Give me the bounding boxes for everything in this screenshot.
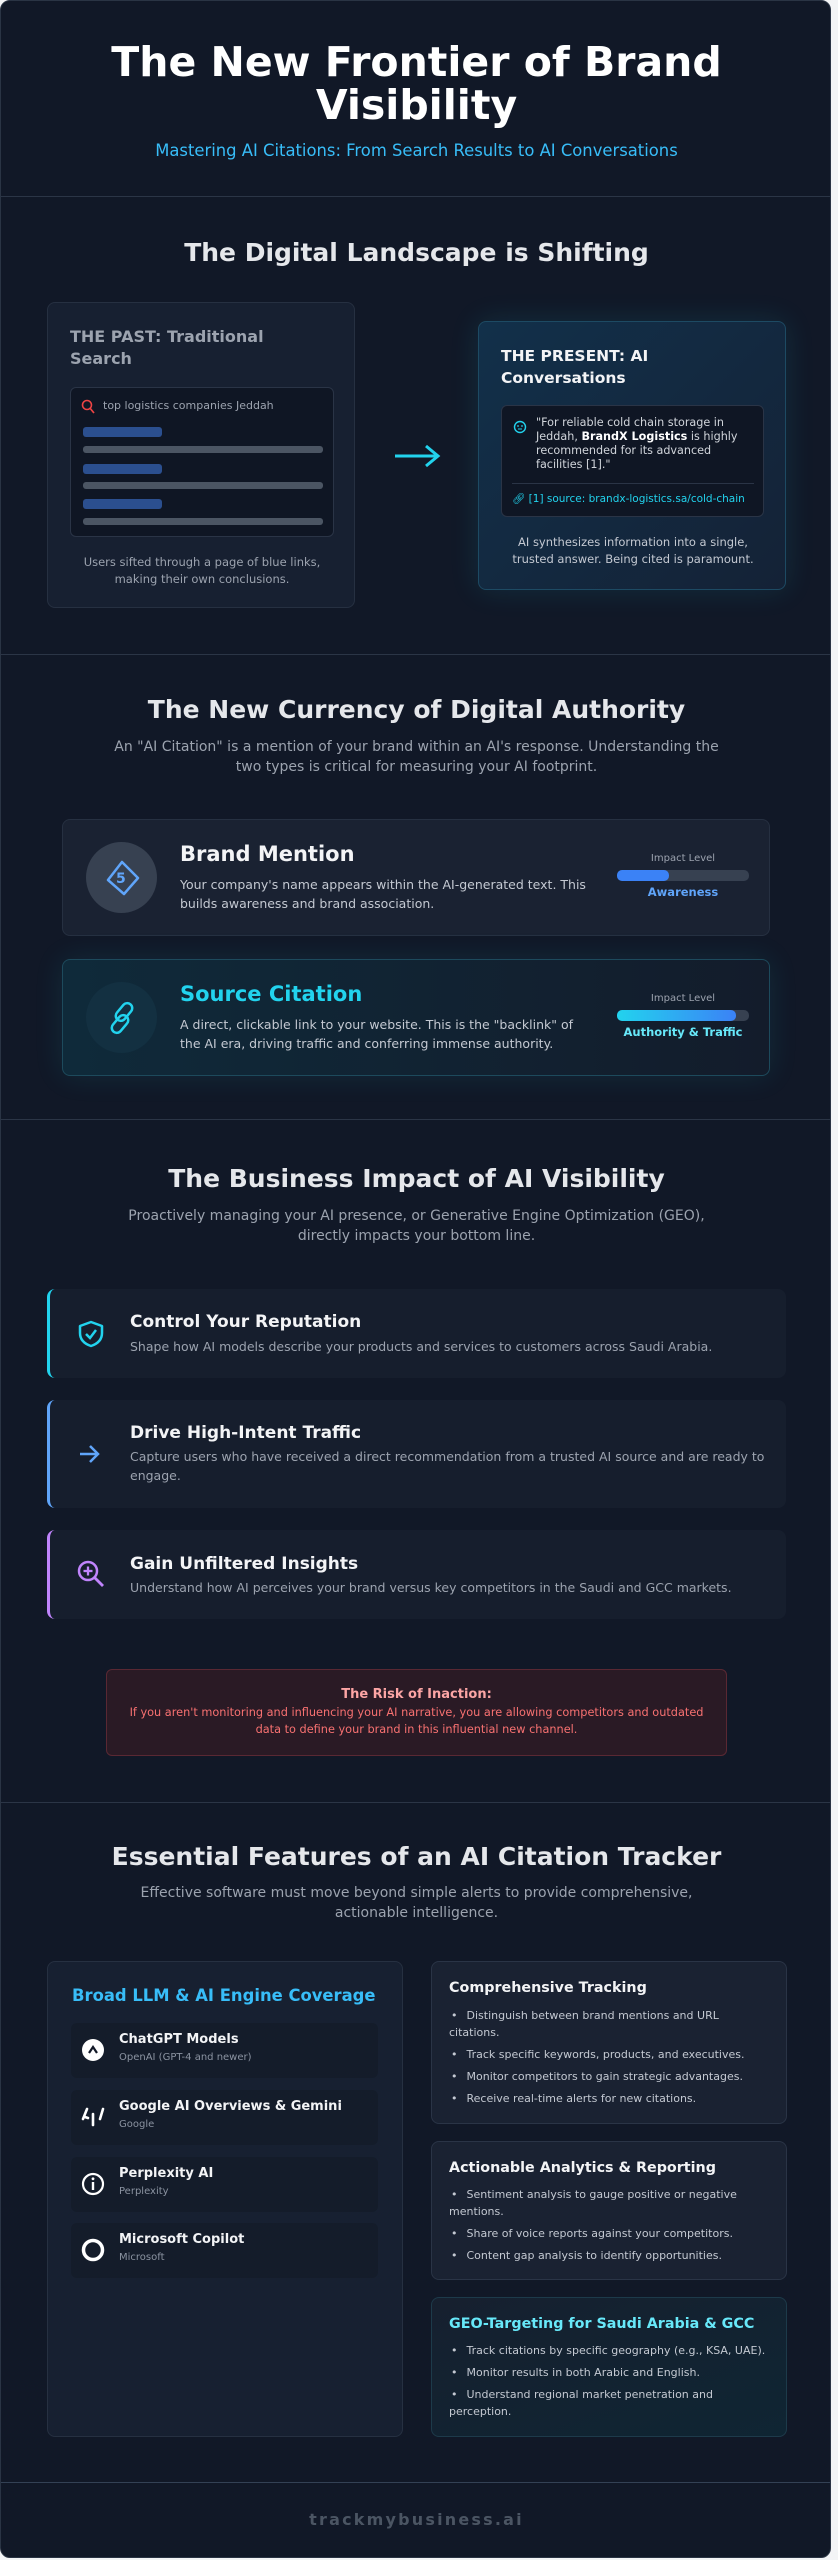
- panel: comprehensive tracking: Track specific keywords, products, and executives.: [466, 2048, 744, 2061]
- llm: chatgpt: ChatGPT Models: [119, 2032, 239, 2047]
- llm: copilot: Microsoft: [119, 2252, 165, 2263]
- item: control reputation: [47, 1289, 786, 1378]
- panel: geo targeting: GEO-Targeting for Saudi Arabia & GCC: [449, 2316, 754, 2332]
- heading: essential features: Essential Features of an AI Citation Tracker: [112, 1842, 721, 1871]
- title: The New Frontier of Brand: [111, 38, 722, 86]
- panel: geo targeting: Monitor results in both Arabic and English.: [466, 2366, 700, 2379]
- icon: bot: [514, 420, 526, 434]
- impact meter: authority: Impact Level: [651, 993, 715, 1004]
- impact meter: awareness: Awareness: [648, 885, 718, 899]
- icon: arrow right: [80, 1445, 100, 1463]
- AI answer box: 🔗︎ [1] source: brandx-logistics.sa/cold-chain: [512, 493, 745, 505]
- panel: analytics: [431, 2141, 787, 2280]
- panel: analytics: Share of voice reports against your competitors.: [466, 2227, 733, 2240]
- panel: comprehensive tracking: [431, 1961, 787, 2124]
- source citation text: Source Citation: [180, 982, 362, 1006]
- footer: trackmybusiness.ai: [309, 2510, 524, 2529]
- features intro: actionable intelligence.: [335, 1905, 498, 1921]
- item: drive traffic: [47, 1400, 786, 1508]
- panel: comprehensive tracking: Monitor competitors to gain strategic advantages.: [466, 2070, 743, 2083]
- icon: zoom in: [78, 1560, 104, 1587]
- llm: perplexity: [71, 2157, 378, 2212]
- impact meter: awareness: Impact Level: [651, 853, 715, 864]
- past title: [70, 327, 264, 368]
- past caption: making their own conclusions.: [115, 572, 289, 586]
- llm: google: Google: [119, 2119, 154, 2130]
- panel: analytics: Content gap analysis to identify opportunities.: [466, 2249, 722, 2262]
- coverage title: Broad LLM & AI Engine Coverage: [72, 1986, 376, 2005]
- panel: geo targeting: Understand regional market penetration and perception.: [449, 2388, 713, 2418]
- llm: copilot: [71, 2223, 378, 2278]
- panel: analytics: Actionable Analytics & Reporting: [449, 2160, 716, 2176]
- panel: geo targeting: [431, 2297, 787, 2437]
- panel: brand mention: Your company's name appears within the AI-generated text. This builds awareness and brand association.: [180, 877, 586, 911]
- item: drive traffic: Drive High-Intent Traffic: [130, 1423, 361, 1443]
- panel: analytics: Sentiment analysis to gauge positive or negative mentions.: [449, 2188, 737, 2218]
- icon: tag: [86, 842, 157, 913]
- business intro: directly impacts your bottom line.: [298, 1228, 535, 1244]
- title: Visibility: [316, 81, 517, 129]
- business intro: [128, 1208, 705, 1244]
- panel: comprehensive tracking: Comprehensive Tracking: [449, 1980, 647, 1996]
- search results mock: top logistics companies Jeddah: [103, 399, 274, 412]
- callout: risk of inaction: If you aren't monitoring and influencing your AI narrative, you are allowing competitors and outdated: [130, 1706, 703, 1719]
- callout: risk of inaction: data to define your brand in this influential new channel.: [256, 1723, 577, 1736]
- present caption: AI synthesizes information into a single,: [518, 535, 748, 549]
- heading: business impact: The Business Impact of AI Visibility: [168, 1164, 665, 1193]
- llm: google: Google AI Overviews & Gemini: [119, 2099, 342, 2114]
- impact meter: awareness: [617, 853, 749, 899]
- icon: shield: [78, 1320, 104, 1348]
- panel: the past: [47, 302, 355, 608]
- llm: copilot: Microsoft Copilot: [119, 2232, 244, 2247]
- item: drive traffic: Capture users who have received a direct recommendation from a trusted AI source and are ready to engage.: [130, 1449, 764, 1483]
- heading: new currency: The New Currency of Digital Authority: [148, 695, 685, 724]
- intro text: An "AI Citation" is a mention of your brand within an AI's response. Understanding the: [114, 739, 719, 755]
- panel: comprehensive tracking: Distinguish between brand mentions and URL citations.: [449, 2009, 719, 2039]
- icon: search: [82, 400, 95, 414]
- search results mock: [70, 387, 334, 537]
- features intro: Effective software must move beyond simple alerts to provide comprehensive,: [141, 1885, 692, 1901]
- callout: risk of inaction: [106, 1669, 727, 1756]
- AI answer box: "For reliable cold chain storage in Jeddah, BrandX Logistics is highly recommended for its advanced facilities [1].": [536, 416, 738, 471]
- panel: brand mention: [62, 819, 770, 936]
- past caption: Users sifted through a page of blue links,: [84, 555, 320, 569]
- heading: digital landscape: The Digital Landscape is Shifting: [184, 238, 649, 267]
- icon: tag: 5: [116, 871, 126, 887]
- impact meter: authority: Authority & Traffic: [624, 1025, 742, 1039]
- past title: Search: [70, 349, 132, 368]
- title: [111, 38, 722, 129]
- item: insights: Understand how AI perceives your brand versus key competitors in the Saudi and GCC markets.: [130, 1580, 732, 1595]
- present caption: trusted answer. Being cited is paramount.: [512, 552, 754, 566]
- callout: risk of inaction: The Risk of Inaction:: [341, 1687, 492, 1702]
- panel: source citation: [62, 959, 770, 1076]
- past caption: [84, 555, 320, 586]
- llm: chatgpt: OpenAI (GPT-4 and newer): [119, 2052, 252, 2063]
- llm: perplexity: Perplexity: [119, 2186, 169, 2197]
- AI answer box: [501, 405, 764, 517]
- subtitle: Mastering AI Citations: From Search Results to AI Conversations: [155, 141, 678, 160]
- brand mention text: Brand Mention: [180, 842, 355, 866]
- llm: google: [71, 2090, 378, 2145]
- present title: THE PRESENT: AI: [501, 347, 648, 365]
- present title: Conversations: [501, 369, 626, 387]
- features intro: [141, 1885, 692, 1921]
- item: control reputation: Shape how AI models describe your products and services to customers across Saudi Arabia.: [130, 1339, 712, 1354]
- llm: chatgpt: [71, 2023, 378, 2078]
- panel: comprehensive tracking: Receive real-time alerts for new citations.: [466, 2092, 696, 2105]
- item: control reputation: Control Your Reputation: [130, 1312, 361, 1332]
- intro text: [114, 739, 719, 775]
- impact meter: authority: [617, 993, 749, 1039]
- llm: perplexity: Perplexity AI: [119, 2166, 213, 2181]
- panel: LLM coverage: [47, 1961, 403, 2437]
- present title: [501, 347, 648, 387]
- icon: link: [86, 982, 157, 1053]
- panel: the present: [478, 321, 786, 590]
- item: insights: [47, 1530, 786, 1619]
- panel: geo targeting: Track citations by specific geography (e.g., KSA, UAE).: [466, 2344, 765, 2357]
- arrow: [395, 444, 440, 468]
- panel: source citation: A direct, clickable link to your website. This is the "backlink" of the AI era, driving traffic and conferring immense authority.: [180, 1017, 573, 1051]
- business intro: Proactively managing your AI presence, or Generative Engine Optimization (GEO),: [128, 1208, 705, 1224]
- intro text: two types is critical for measuring your AI footprint.: [236, 759, 597, 775]
- past title: THE PAST: Traditional: [70, 327, 264, 346]
- present caption: [512, 535, 754, 566]
- item: insights: Gain Unfiltered Insights: [130, 1554, 358, 1574]
